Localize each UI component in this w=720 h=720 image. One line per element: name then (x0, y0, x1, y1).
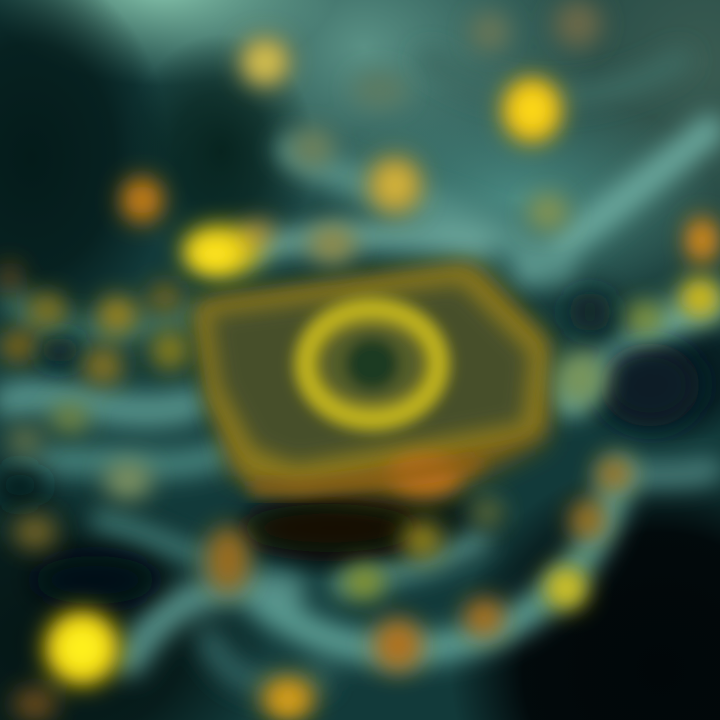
icon: yellow ring with dark centre (306, 309, 438, 419)
chip lower orange glow (389, 457, 461, 493)
chip face (210, 283, 530, 464)
chip base glow (198, 268, 545, 500)
chip lower edge glow (250, 462, 480, 488)
chip: gold rounded panel (195, 265, 548, 500)
dark shapes: shadows around chip (0, 292, 700, 604)
chip rim (195, 265, 548, 488)
